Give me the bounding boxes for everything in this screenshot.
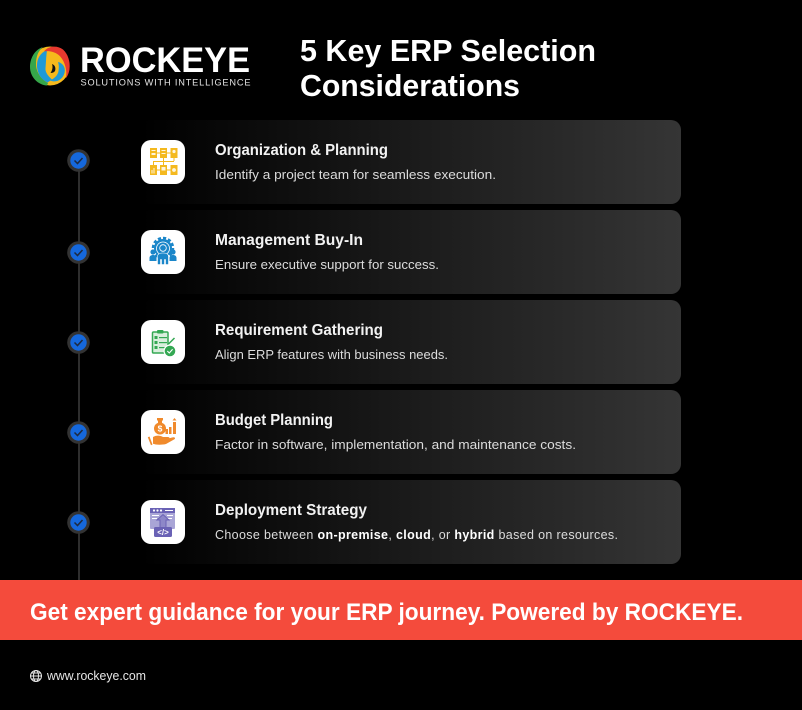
logo (30, 40, 250, 88)
icon: logo swirl (30, 46, 70, 86)
timeline (67, 149, 90, 580)
heading: Requirement Gathering (215, 322, 383, 339)
logo tagline: SOLUTIONS WITH INTELLIGENCE (80, 78, 250, 88)
marker 2 (67, 241, 90, 264)
title: Considerations (300, 68, 520, 103)
icon: org chart (141, 140, 185, 184)
footer website (30, 669, 146, 683)
description: Factor in software, implementation, and maintenance costs. (215, 438, 576, 452)
icon: money on hand: $ (158, 424, 163, 434)
heading: Deployment Strategy (215, 502, 367, 519)
icon: money on hand (141, 410, 185, 454)
heading: Management Buy-In (215, 232, 363, 249)
marker 3 (67, 331, 90, 354)
description: Identify a project team for seamless execution. (215, 168, 496, 182)
title (300, 33, 596, 103)
icon: team and gear (141, 230, 185, 274)
timeline line (78, 160, 80, 580)
panel: management buy-in (140, 210, 681, 294)
description: Choose between on-premise, cloud, or hybrid based on resources. (215, 528, 618, 542)
icon: code deployment (141, 500, 185, 544)
title: 5 Key ERP Selection (300, 33, 596, 68)
marker 1 (67, 149, 90, 172)
heading: Organization & Planning (215, 142, 388, 159)
panel: budget planning (140, 390, 681, 474)
icon: checklist (141, 320, 185, 364)
website address: www.rockeye.com (46, 669, 146, 683)
description: Align ERP features with business needs. (215, 348, 448, 362)
logo wordmark: ROCKEYE (80, 40, 250, 80)
panel: organization and planning (140, 120, 681, 204)
call to action banner: Get expert guidance for your ERP journey. Powered by ROCKEYE. (30, 599, 743, 626)
icon: code deployment: </> (157, 528, 169, 537)
call to action banner (0, 580, 802, 640)
marker 4 (67, 421, 90, 444)
marker 5 (67, 511, 90, 534)
panel: requirement gathering (140, 300, 681, 384)
icon: globe (30, 670, 42, 682)
panel: deployment strategy (140, 480, 681, 564)
description: Ensure executive support for success. (215, 258, 439, 272)
heading: Budget Planning (215, 412, 333, 429)
